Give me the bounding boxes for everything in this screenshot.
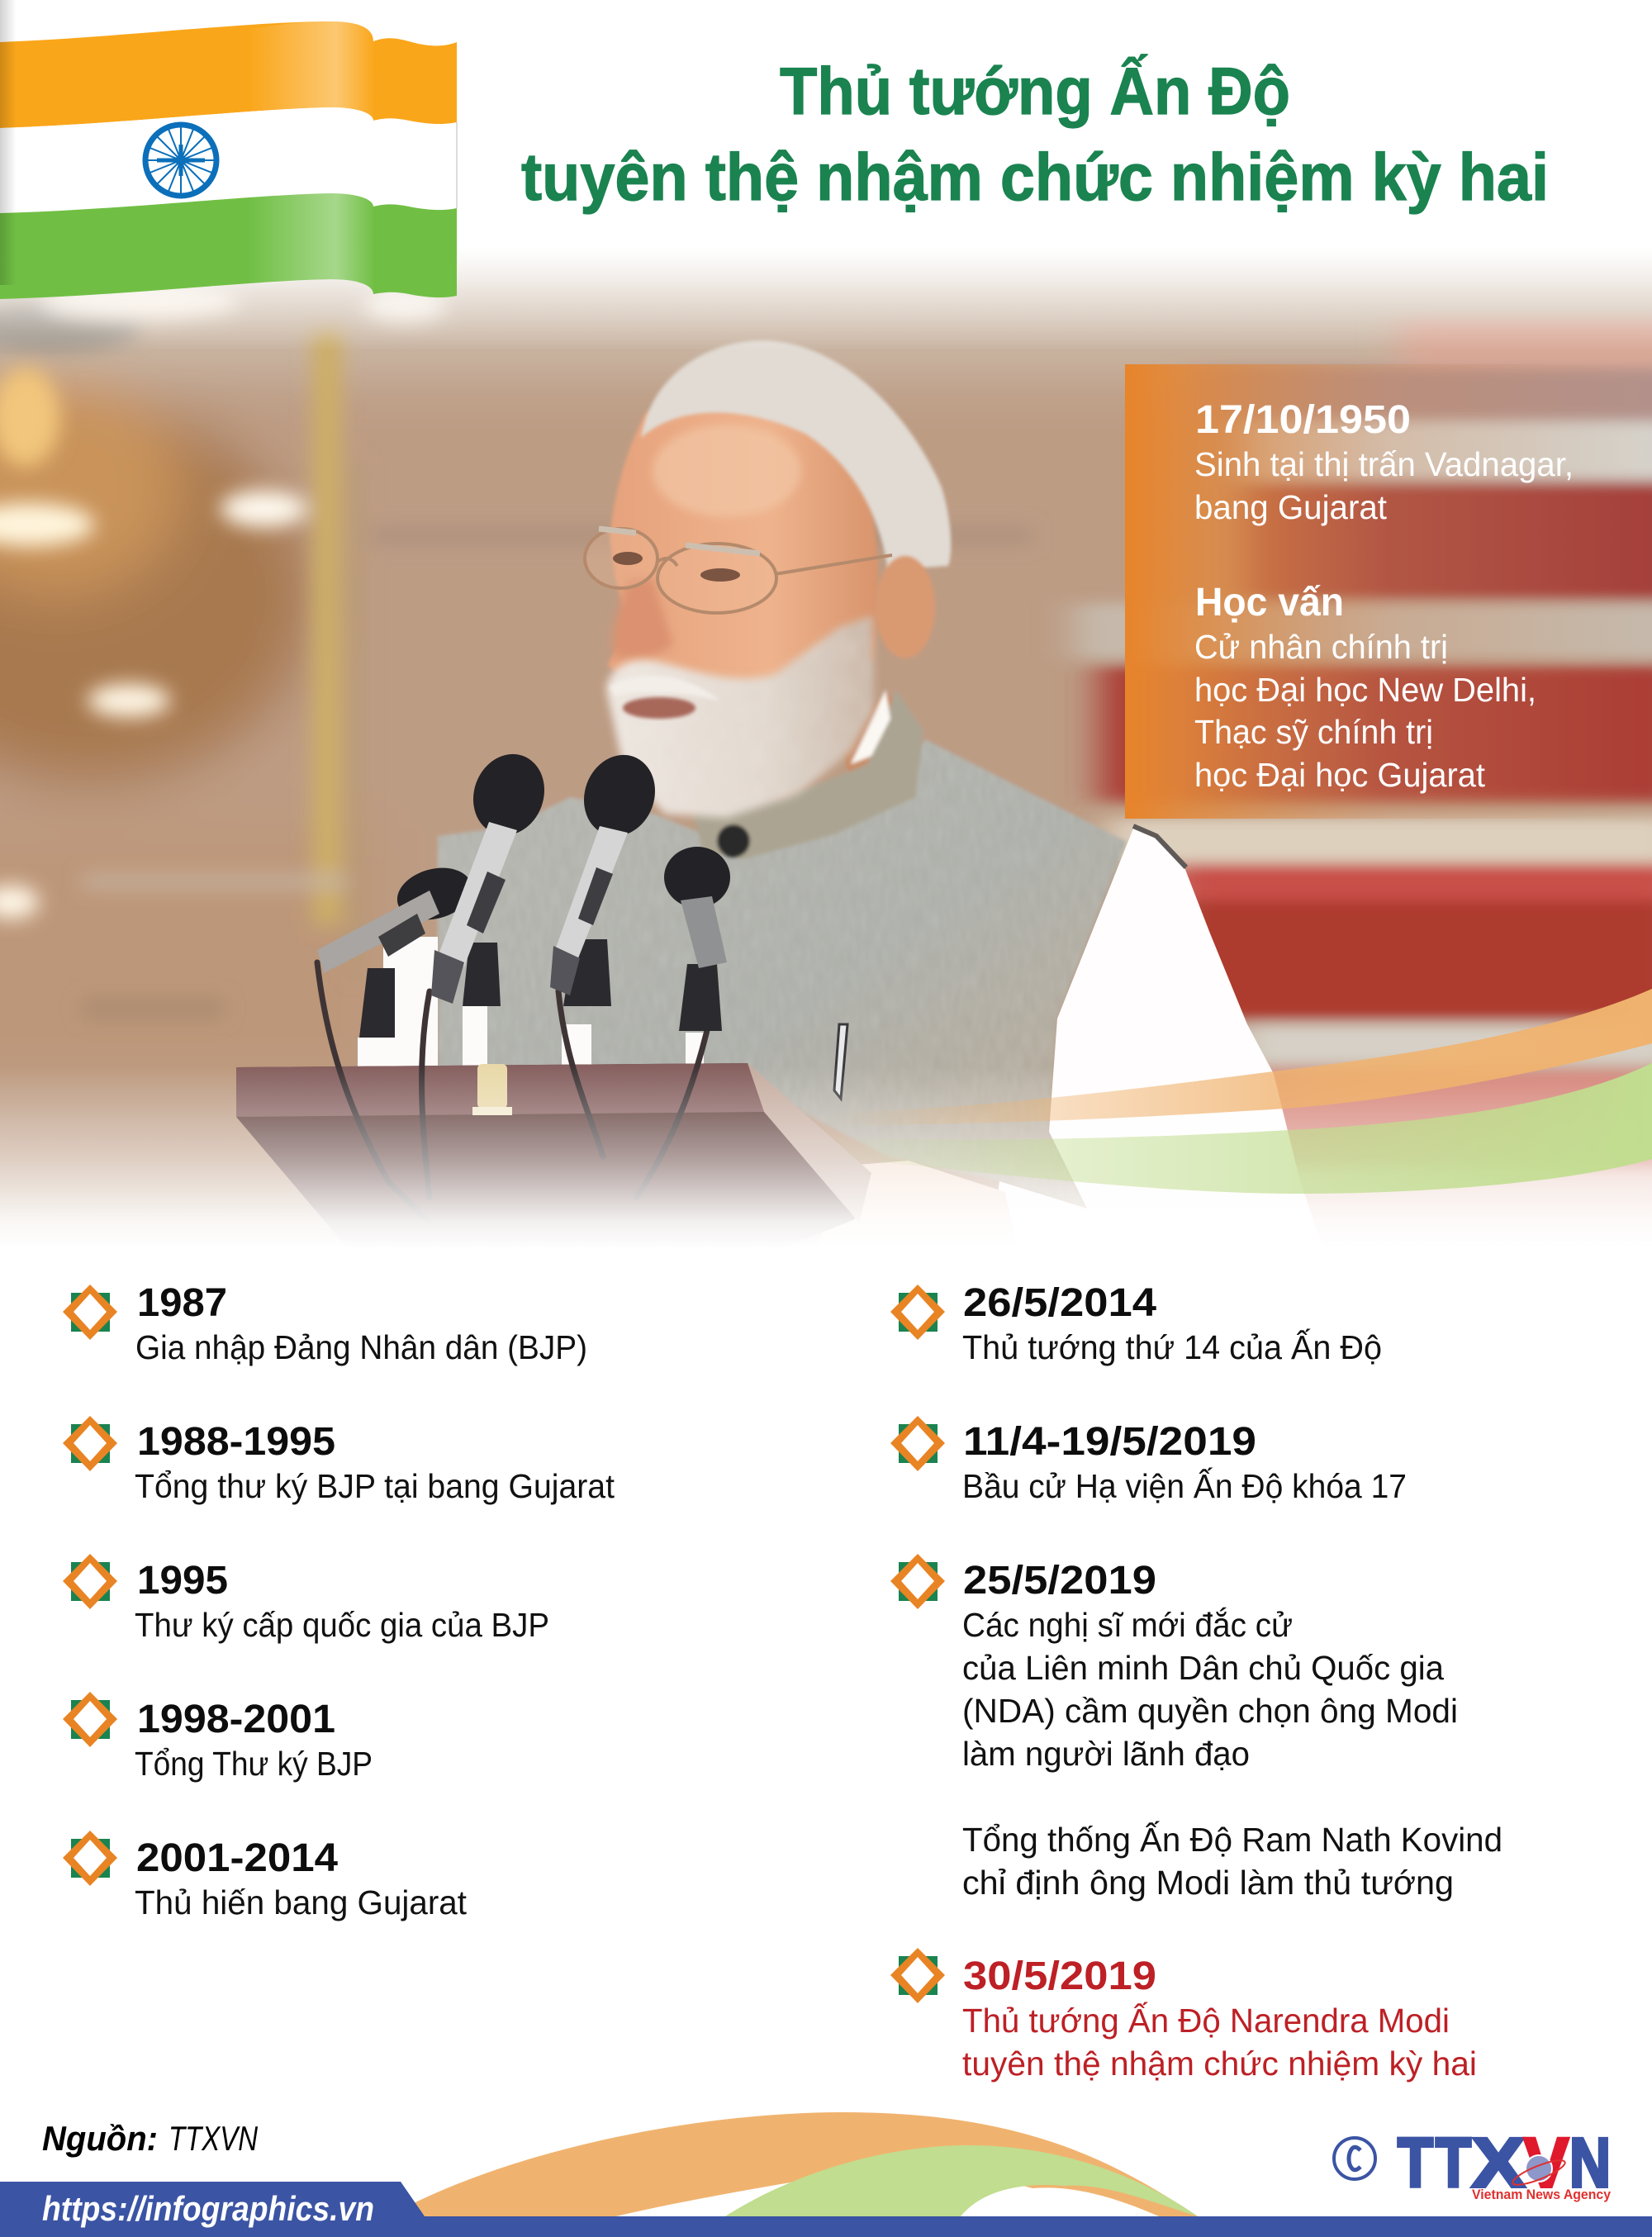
event 1987: Gia nhập Đảng Nhân dân (BJP): [135, 1328, 587, 1366]
source credit: [42, 2119, 259, 2158]
event 30/5/2019: tuyên thệ nhậm chức nhiệm kỳ hai: [962, 2045, 1477, 2083]
logo: TTXVN: T: [1436, 2124, 1471, 2201]
website url: https://infographics.vn: [42, 2189, 374, 2228]
event 2001-2014: Thủ hiến bang Gujarat: [135, 1883, 468, 1921]
flag: right edge: [456, 122, 458, 208]
event 11/4-19/5/2019: [890, 1416, 1407, 1505]
cables: [317, 962, 710, 1223]
education heading: Học vấn: [1195, 581, 1344, 625]
icon: copyright: [1334, 2138, 1375, 2179]
birth place: bang Gujarat: [1194, 488, 1388, 526]
figure: glasses and eyes: [585, 529, 892, 613]
flag: white band: [0, 107, 457, 213]
education details: Cử nhân chính trị: [1194, 628, 1448, 666]
podium: [236, 1063, 871, 1247]
birth place: Sinh tại thị trấn Vadnagar,: [1194, 445, 1574, 483]
event 30/5/2019: [890, 1948, 1477, 2083]
figure: face: [607, 401, 878, 710]
ribbon: green wave: [826, 1063, 1652, 1194]
figure: vest: [438, 739, 1127, 1209]
event 25/5/2019: 25/5/2019: [963, 1559, 1156, 1603]
event 1987: [63, 1281, 587, 1366]
left edge shadow: [0, 0, 17, 285]
title: tuyên thệ nhậm chức nhiệm kỳ hai: [521, 140, 1549, 215]
source credit: Nguồn:: [42, 2119, 158, 2158]
event 1987: 1987: [137, 1281, 227, 1325]
birth place: [1194, 445, 1574, 526]
figure: shoulder edge: [1133, 826, 1186, 867]
microphones: [317, 744, 730, 1038]
birth date: 17/10/1950: [1195, 398, 1411, 442]
title: [521, 54, 1549, 215]
event 2001-2014: [63, 1831, 468, 1921]
event 26/5/2014: 26/5/2014: [963, 1281, 1156, 1325]
figure: hair: [641, 340, 951, 570]
logo: TTXVN: X: [1472, 2124, 1525, 2201]
event 25/5/2019: của Liên minh Dân chủ Quốc gia: [962, 1649, 1444, 1687]
event 26/5/2014: [890, 1281, 1382, 1366]
logo: TTXVN: [1398, 2124, 1611, 2202]
figure: mouth: [623, 697, 695, 719]
event 25/5/2019: Các nghị sĩ mới đắc cử: [962, 1606, 1293, 1644]
footer arch: green: [725, 2145, 1198, 2216]
photo background: soft colour field: [0, 231, 1652, 1305]
event 1995: 1995: [137, 1559, 228, 1603]
logo: TTXVN: N: [1569, 2124, 1611, 2201]
event 11/4-19/5/2019: 11/4-19/5/2019: [963, 1420, 1256, 1464]
event 25/5/2019: làm người lãnh đạo: [962, 1735, 1250, 1773]
flag: highlight: [248, 21, 373, 294]
flag of India: [0, 21, 457, 299]
education details: học Đại học New Delhi,: [1194, 671, 1536, 709]
timeline: left column: [63, 1281, 615, 1921]
event 1995: Thư ký cấp quốc gia của BJP: [135, 1606, 549, 1644]
figure: hand: [814, 1161, 1018, 1251]
figure: shirt panels between microphones: [358, 937, 704, 1080]
event 25/5/2019: (NDA) cầm quyền chọn ông Modi: [962, 1692, 1458, 1730]
event 1998-2001: 1998-2001: [137, 1698, 335, 1741]
title: Thủ tướng Ấn Độ: [780, 54, 1290, 129]
panel: biography box: [1125, 364, 1652, 819]
event 1988-1995: [63, 1416, 615, 1505]
bottom fade: [0, 1066, 1652, 1330]
figure: white shirt: [991, 829, 1324, 1251]
emblem on podium: [472, 1064, 512, 1115]
figure: ear: [876, 556, 935, 658]
photo background: bokeh lights and column: [0, 283, 1032, 1018]
education details: [1194, 628, 1536, 794]
event 1995: [63, 1554, 549, 1644]
education details: Thạc sỹ chính trị: [1194, 713, 1433, 751]
panel: photo of prime minister at podium: [0, 157, 1652, 1330]
figure: moustache: [610, 676, 719, 701]
timeline: right column: [890, 1281, 1502, 2083]
figure: beard: [606, 615, 874, 818]
figure: neck and collar: [694, 690, 923, 859]
event 1998-2001: [63, 1692, 373, 1783]
education details: học Đại học Gujarat: [1194, 756, 1486, 794]
footer arch: orange: [388, 2112, 1198, 2216]
event 25/5/2019: [890, 1554, 1502, 1902]
event 11/4-19/5/2019: Bầu cử Hạ viện Ấn Độ khóa 17: [962, 1467, 1407, 1505]
event 1988-1995: Tổng thư ký BJP tại bang Gujarat: [135, 1467, 615, 1505]
logo: TTXVN: V: [1524, 2124, 1569, 2201]
logo: TTXVN: Vietnam News Agency: [1472, 2187, 1611, 2202]
event 25/5/2019: Tổng thống Ấn Độ Ram Nath Kovind: [962, 1821, 1502, 1859]
event 30/5/2019: Thủ tướng Ấn Độ Narendra Modi: [962, 2002, 1450, 2040]
top fade: [0, 157, 1652, 351]
pen in vest pocket: [834, 1024, 847, 1099]
event 30/5/2019: 30/5/2019: [963, 1954, 1156, 1998]
photo background: stage bands at right: [1074, 318, 1652, 1251]
footer bar: [0, 2182, 1652, 2237]
logo: TTXVN: T: [1398, 2124, 1433, 2201]
event 1988-1995: 1988-1995: [137, 1420, 335, 1464]
source credit: TTXVN: [169, 2119, 259, 2158]
event 2001-2014: 2001-2014: [136, 1836, 338, 1880]
flag: green band: [0, 193, 457, 299]
event 1998-2001: Tổng Thư ký BJP: [135, 1745, 373, 1783]
flag: Ashoka chakra: [145, 125, 216, 196]
event 26/5/2014: Thủ tướng thứ 14 của Ấn Độ: [962, 1328, 1382, 1366]
ribbon: orange wave: [826, 989, 1652, 1125]
flag: orange band: [0, 21, 457, 128]
event 25/5/2019: chỉ định ông Modi làm thủ tướng: [962, 1864, 1454, 1902]
